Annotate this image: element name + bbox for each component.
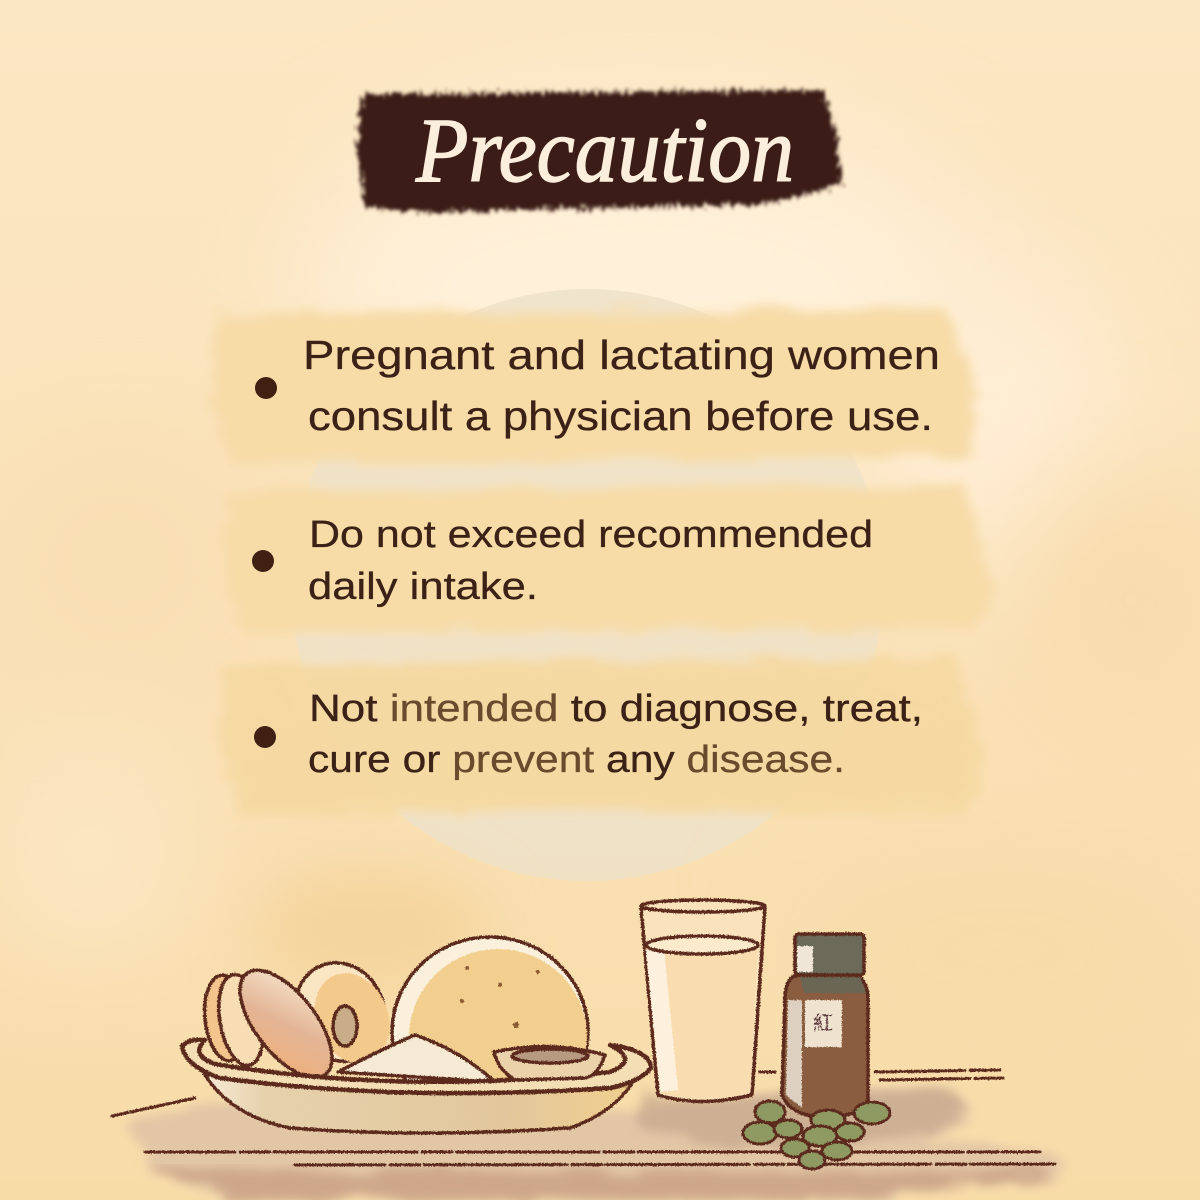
bullet 3 [254, 726, 276, 748]
illustration: supplement bottle [782, 934, 868, 1117]
bowl [182, 1040, 651, 1133]
bottle cap [795, 934, 864, 975]
glass body [641, 906, 765, 1102]
bagel [280, 949, 403, 1075]
bullet 2 [252, 550, 274, 572]
label text: 紅 [813, 1012, 833, 1035]
brush band 1 [210, 308, 977, 464]
bottle body [782, 975, 868, 1117]
rice mound [338, 1035, 495, 1082]
item 3: not intended to diagnose [220, 658, 987, 814]
illustration: glass of milk [641, 900, 765, 1102]
liquid surface [646, 936, 758, 954]
text 3: cure or prevent any disease. [308, 739, 828, 781]
brush band 3 [220, 658, 987, 814]
illustration: green pills [743, 1101, 890, 1169]
table surface [112, 1070, 1070, 1200]
title banner [357, 90, 842, 212]
bullet 1 [255, 377, 277, 399]
title brush stroke [357, 90, 842, 212]
glass highlight [646, 950, 678, 1092]
text 1: consult a physician before use. [308, 393, 933, 439]
cap highlight [797, 946, 813, 972]
background circle [291, 289, 883, 881]
illustration: bread bowl [182, 937, 651, 1133]
text 2: Do not exceed recommended [309, 514, 873, 556]
text 1: Pregnant and lactating women [303, 332, 940, 378]
glass rim [641, 900, 765, 912]
brush band 2 [223, 485, 994, 634]
bottle highlight [786, 1000, 802, 1108]
bottle label [805, 1000, 842, 1047]
item 1: pregnant and lactating women [210, 308, 977, 464]
text 2: daily intake. [308, 566, 538, 608]
bread slices [201, 955, 349, 1093]
title text: Precaution [415, 99, 794, 201]
large round bread [392, 937, 588, 1127]
text 3: Not intended to diagnose, treat, [309, 688, 873, 730]
item 2: recommended daily intake [223, 485, 994, 634]
small dish [494, 1047, 605, 1080]
bottle shoulder [800, 977, 866, 993]
liquid [645, 942, 758, 1098]
